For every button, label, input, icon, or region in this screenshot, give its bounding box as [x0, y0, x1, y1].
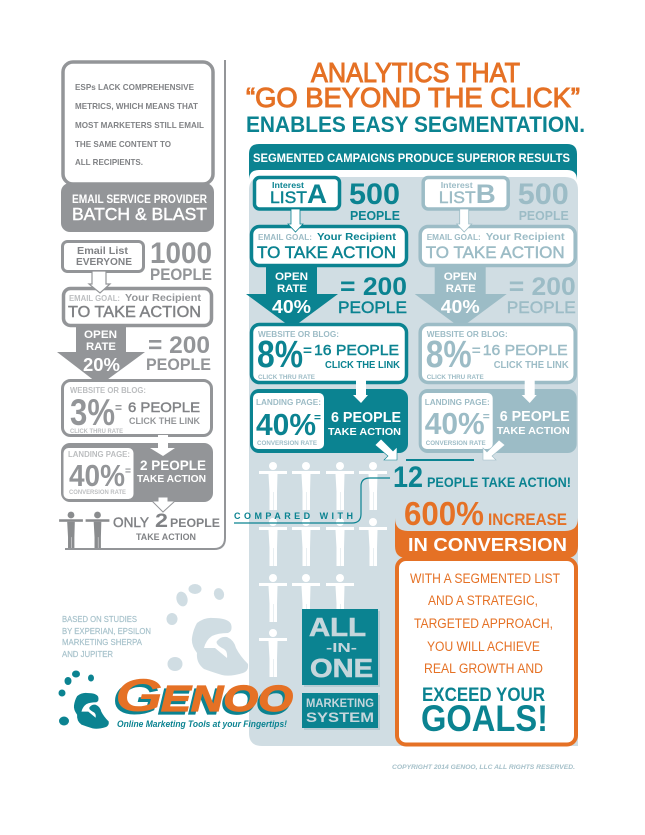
- arrow: open rate 20%: [57, 326, 145, 385]
- website click thru box: CLICK THE LINK: [494, 360, 569, 371]
- heading: batch and blast banner: EMAIL SERVICE PROVIDER: [72, 192, 207, 206]
- connector: compared with: COMPARED WITH: [234, 511, 353, 521]
- arrow: click to landing: [150, 435, 175, 456]
- landing page conversion box: 40%: [69, 458, 125, 493]
- arrow: landing to total: [375, 439, 397, 460]
- connector: compared with: [234, 478, 390, 523]
- email goal box: [420, 226, 575, 266]
- landing page conversion box: [419, 389, 577, 453]
- website click thru box: [252, 324, 406, 382]
- panel: ESP intro text box: [63, 62, 213, 184]
- 500 people count: PEOPLE: [350, 208, 400, 223]
- callout: all in one: -IN-: [326, 640, 357, 655]
- equals 200 people: [507, 273, 576, 317]
- website click thru box: WEBSITE OR BLOG:: [427, 330, 508, 339]
- list B box: [423, 178, 508, 209]
- email list box: Email List: [77, 245, 129, 257]
- landing page conversion box: CONVERSION RATE: [426, 441, 486, 447]
- landing page conversion box: [61, 443, 213, 502]
- website click thru box: WEBSITE OR BLOG:: [70, 386, 146, 395]
- title: “GO BEYOND THE CLICK”: [246, 82, 580, 113]
- panel: conclusion: YOU WILL ACHIEVE: [427, 639, 540, 654]
- list A box: Interest: [272, 180, 304, 190]
- wordmark: ENOO: [161, 678, 293, 719]
- website click thru box: [62, 380, 212, 436]
- icon: teal logo mark: [58, 670, 109, 729]
- list B box: B: [476, 179, 496, 209]
- panel: conclusion: GOALS!: [421, 698, 548, 739]
- copyright: COPYRIGHT 2014 GENOO, LLC ALL RIGHTS RESERVED.: [392, 764, 575, 771]
- panel: batch and blast funnel: [57, 237, 220, 552]
- 500 people count: PEOPLE: [519, 208, 569, 223]
- arrow: list to goal: [288, 209, 303, 232]
- wordmark: G: [112, 672, 160, 724]
- email goal box: [64, 288, 212, 326]
- equals 200 people: [146, 332, 211, 374]
- landing page conversion box: TAKE ACTION: [328, 426, 401, 438]
- arrow: open rate 40%: RATE: [277, 283, 307, 295]
- website click thru box: CLICK THE LINK: [129, 416, 200, 427]
- icon: twelve people: [259, 462, 387, 677]
- 500 people count: 500: [349, 178, 400, 211]
- email goal box: Your Recipient: [486, 231, 565, 243]
- panel: conclusion: EXCEED YOUR: [422, 685, 545, 706]
- panel: ESP intro text box: METRICS, WHICH MEANS THAT: [75, 101, 199, 111]
- equals 200 people: = 200: [340, 273, 407, 301]
- email goal box: Your Recipient: [317, 231, 397, 243]
- arrow: open rate 40%: OPEN: [444, 271, 477, 283]
- landing page conversion box: TAKE ACTION: [497, 425, 570, 437]
- website click thru box: CLICK THRU RATE: [70, 429, 123, 435]
- 600% increase: INCREASE: [488, 511, 567, 529]
- panel: conclusion: TARGETED APPROACH,: [414, 616, 553, 631]
- callout: marketing system: SYSTEM: [306, 709, 374, 725]
- 1000 people count: [150, 237, 212, 284]
- 600% increase: 600%: [404, 495, 484, 532]
- landing page conversion box: CONVERSION RATE: [257, 441, 317, 447]
- list A box: A: [307, 179, 327, 209]
- email goal box: EMAIL GOAL:: [69, 294, 120, 303]
- panel: list A funnel: [246, 178, 408, 460]
- website click thru box: 16 PEOPLE: [314, 342, 399, 359]
- logo: genoo: [58, 669, 293, 729]
- icon: large pale logo mark: [166, 584, 248, 676]
- icon: two people: [59, 512, 110, 548]
- landing page conversion box: =: [125, 466, 131, 477]
- panel: conclusion: [397, 559, 576, 744]
- equals 200 people: PEOPLE: [338, 298, 407, 317]
- callout: all in one: ALL: [309, 612, 366, 642]
- list A box: [254, 178, 340, 209]
- panel: conclusion: REAL GROWTH AND: [424, 661, 543, 676]
- list B box: Interest: [441, 180, 473, 190]
- only 2 people result: 2: [155, 511, 168, 532]
- email goal box: TO TAKE ACTION: [257, 244, 396, 262]
- title: ENABLES EASY SEGMENTATION.: [246, 112, 585, 137]
- landing page conversion box: LANDING PAGE:: [425, 398, 490, 407]
- website click thru box: 6 PEOPLE: [128, 399, 200, 415]
- arrow: landing to result: [152, 497, 175, 512]
- equals 200 people: [338, 273, 407, 317]
- heading: batch and blast banner: BATCH & BLAST: [72, 204, 207, 224]
- landing page conversion box: =: [314, 412, 321, 424]
- email goal box: EMAIL GOAL:: [258, 233, 312, 242]
- landing page conversion box: =: [483, 411, 490, 423]
- arrow: landing to total: [483, 440, 505, 460]
- callout: marketing system: [302, 693, 380, 730]
- panel: ESP intro text box: ALL RECIPIENTS.: [75, 157, 143, 167]
- list B box: LIST: [439, 188, 476, 207]
- only 2 people result: ONLY: [113, 514, 150, 530]
- arrow: list to goal: [89, 271, 110, 293]
- equals 200 people: = 200: [509, 273, 576, 301]
- panel: segmented results background: [249, 177, 578, 746]
- website click thru box: [420, 324, 575, 382]
- email list box: EVERYONE: [76, 256, 132, 268]
- arrow: open rate 20%: 20%: [83, 355, 120, 375]
- banner: in conversion: IN CONVERSION: [408, 534, 567, 555]
- title: [246, 57, 585, 137]
- callout: all in one: [302, 609, 380, 687]
- email goal box: Your Recipient: [125, 292, 202, 304]
- arrow: list to goal: [457, 209, 472, 232]
- panel: conclusion: WITH A SEGMENTED LIST: [410, 571, 560, 586]
- only 2 people result: [113, 511, 220, 542]
- banner: segmented campaigns: [249, 144, 577, 180]
- 12 people take action: PEOPLE TAKE ACTION!: [427, 474, 571, 490]
- only 2 people result: PEOPLE: [170, 516, 220, 530]
- arrow: open rate 20%: RATE: [86, 341, 116, 353]
- banner: in conversion: [395, 518, 578, 558]
- panel: conclusion: AND A STRATEGIC,: [428, 593, 538, 608]
- website click thru box: CLICK THRU RATE: [427, 375, 484, 381]
- 1000 people count: 1000: [150, 237, 212, 270]
- panel: batch and blast column outline: [65, 60, 225, 549]
- sources note: BY EXPERIAN, EPSILON: [62, 626, 151, 636]
- tagline: Online Marketing Tools at your Fingertips!: [117, 719, 287, 729]
- website click thru box: 3%: [70, 392, 115, 433]
- website click thru box: =: [303, 342, 312, 358]
- only 2 people result: TAKE ACTION: [136, 532, 196, 542]
- sources note: BASED ON STUDIES: [62, 614, 137, 624]
- panel: list B funnel: [415, 178, 577, 460]
- equals 200 people: PEOPLE: [146, 356, 211, 374]
- arrow: open rate 40%: 40%: [441, 296, 480, 317]
- arrow: open rate 40%: OPEN: [275, 271, 308, 283]
- website click thru box: WEBSITE OR BLOG:: [258, 330, 339, 339]
- website click thru box: CLICK THRU RATE: [258, 375, 315, 381]
- 1000 people count: PEOPLE: [150, 266, 212, 284]
- landing page conversion box: [250, 389, 408, 453]
- arrow: open rate 40%: RATE: [446, 283, 476, 295]
- title: ANALYTICS THAT: [311, 57, 520, 88]
- wordmark: [112, 669, 293, 724]
- equals 200 people: = 200: [148, 332, 210, 359]
- website click thru box: =: [115, 400, 122, 415]
- website click thru box: 16 PEOPLE: [483, 342, 568, 359]
- landing page conversion box: LANDING PAGE:: [68, 450, 130, 459]
- equals 200 people: PEOPLE: [507, 298, 576, 317]
- website click thru box: 8%: [257, 334, 303, 376]
- wordmark: ENOO: [158, 681, 291, 722]
- website click thru box: CLICK THE LINK: [325, 360, 401, 371]
- 12 people take action: 12: [393, 461, 423, 494]
- email goal box: TO TAKE ACTION: [68, 304, 201, 321]
- panel: ESP intro text box: MOST MARKETERS STILL EMAIL: [75, 120, 204, 130]
- arrow: open rate 40%: 40%: [272, 296, 311, 317]
- landing page conversion box: 2 PEOPLE: [140, 457, 206, 473]
- email goal box: [252, 226, 406, 266]
- landing page conversion box: 40%: [425, 406, 485, 441]
- sources note: [62, 614, 151, 659]
- landing page conversion box: LANDING PAGE:: [256, 398, 321, 407]
- list A box: LIST: [270, 188, 307, 207]
- website click thru box: 8%: [426, 334, 472, 376]
- arrow: open rate 20%: OPEN: [84, 329, 117, 341]
- connector between list totals: [406, 459, 474, 461]
- sources note: MARKETING SHERPA: [62, 637, 142, 647]
- panel: ESP intro text box: ESPs LACK COMPREHENSIVE: [75, 82, 194, 92]
- landing page conversion box: CONVERSION RATE: [69, 490, 126, 496]
- landing page conversion box: TAKE ACTION: [137, 474, 206, 485]
- email goal box: EMAIL GOAL:: [427, 233, 481, 242]
- panel: ESP intro text box: THE SAME CONTENT TO: [75, 139, 171, 149]
- 600% increase: [404, 495, 567, 532]
- 12 people take action: [393, 461, 571, 494]
- arrow: click to landing: [522, 380, 537, 403]
- landing page conversion box: 6 PEOPLE: [500, 409, 570, 425]
- landing page conversion box: 40%: [256, 407, 316, 442]
- website click thru box: =: [472, 342, 481, 358]
- arrow: click to landing: [353, 380, 368, 403]
- 500 people count: 500: [518, 178, 569, 211]
- callout: marketing system: MARKETING: [306, 698, 374, 710]
- banner: segmented campaigns: SEGMENTED CAMPAIGNS PRODUCE SUPERIOR RESULTS: [253, 151, 570, 165]
- landing page conversion box: 6 PEOPLE: [331, 410, 401, 426]
- sources note: AND JUPITER: [62, 649, 113, 659]
- heading: batch and blast banner: [61, 183, 214, 232]
- arrow: open rate 40%: [246, 267, 338, 328]
- email list box: [62, 242, 144, 272]
- callout: all in one: ONE: [310, 653, 373, 683]
- wordmark: G: [115, 669, 163, 721]
- arrow: open rate 40%: [415, 267, 507, 328]
- email goal box: TO TAKE ACTION: [426, 244, 565, 262]
